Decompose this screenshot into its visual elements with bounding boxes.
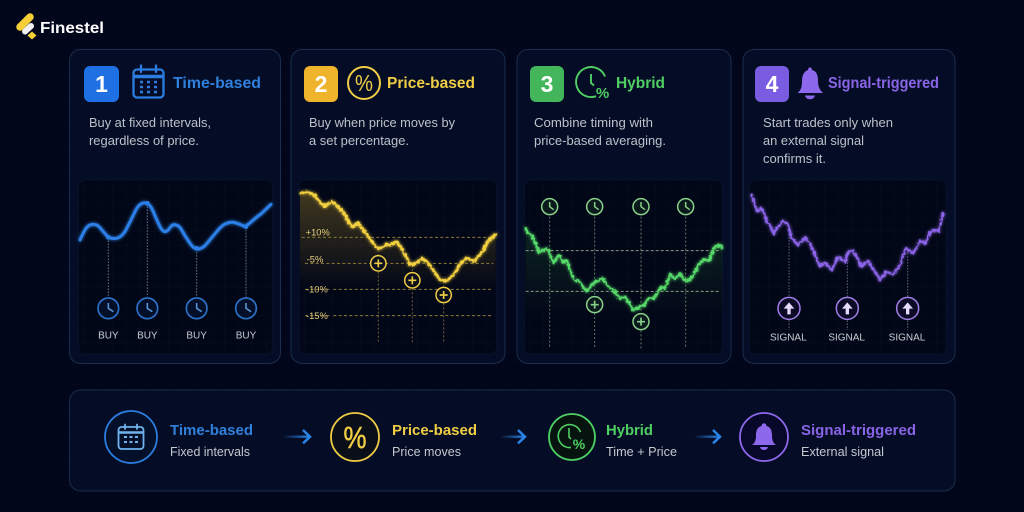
description [309,115,455,148]
heading: Signal-triggered: Signal-triggered [828,75,939,92]
clock and BUY labels: BUY [137,330,158,341]
arrow [694,430,720,443]
item: Time-based: Time-based [170,422,253,439]
chart: fixed interval buys [79,180,273,354]
item: Time-based: Fixed intervals [170,445,250,459]
clock and BUY labels [98,298,257,341]
arrow [500,430,525,443]
description [89,115,211,148]
signal markers and labels: SIGNAL [828,333,865,344]
heading: Price-based: Price-based [387,75,475,92]
description [534,115,666,148]
description: a set percentage. [309,133,409,148]
percent level labels [306,228,330,321]
clock and BUY labels: BUY [236,330,257,341]
item: Price-based [331,413,477,461]
description: Buy at fixed intervals, [89,115,211,130]
panel: time-based [70,50,280,364]
percent level labels: -15% [306,311,328,321]
item: Time-based [105,411,253,463]
percent level labels: -10% [306,284,328,294]
badge 2: 2 [315,71,327,97]
icon: bell [798,67,823,99]
description: price-based averaging. [534,133,666,148]
panel: price-based [291,50,505,364]
icon: calendar [134,66,164,98]
badge 3: 3 [541,71,553,97]
buy markers [371,256,451,303]
percent level labels: +10% [306,228,330,238]
logo: Finestel: Finestel [40,20,104,37]
panel: summary flow [70,390,955,491]
badge 1 [84,66,119,102]
icon: percent circle: % [355,70,373,96]
item: Hybrid: % [573,436,586,452]
icon: clock with percent: % [596,85,609,102]
description: regardless of price. [89,133,199,148]
clock markers [542,199,694,215]
item: Signal-triggered: External signal [801,445,884,459]
description: Combine timing with [534,115,653,130]
description [763,115,893,166]
heading: Time-based: Time-based [173,75,261,92]
item: Hybrid: Time + Price [606,445,677,459]
badge 1: 1 [95,71,108,97]
item: Price-based: % [344,420,366,455]
description: an external signal [763,133,864,148]
item: Hybrid [549,414,677,460]
description: confirms it. [763,151,826,166]
panel: hybrid [517,50,731,364]
item: Hybrid: Hybrid [606,422,653,439]
arrow [283,430,310,443]
panel: signal-triggered [743,50,955,364]
buy markers [587,297,649,330]
icon: clock with percent [576,67,609,102]
item: Price-based: Price moves [392,445,461,459]
signal markers and labels: SIGNAL [770,333,807,344]
icon: percent circle [348,67,380,99]
badge 3 [530,66,564,102]
item: Price-based: Price-based [392,422,477,439]
clock and BUY labels: BUY [186,330,207,341]
signal markers and labels [770,297,926,344]
signal markers and labels: SIGNAL [889,333,926,344]
logo: Finestel [20,17,104,40]
chart: time and price [524,180,722,354]
heading: Hybrid: Hybrid [616,75,665,92]
description: Start trades only when [763,115,893,130]
description: Buy when price moves by [309,115,455,130]
badge 2 [304,66,338,102]
chart: signals [749,180,946,354]
chart: percentage drops [299,180,497,354]
percent level labels: -5% [307,254,323,264]
clock and BUY labels: BUY [98,330,119,341]
badge 4 [755,66,789,102]
item: Signal-triggered: Signal-triggered [801,422,916,439]
item: Signal-triggered [740,413,916,461]
badge 4: 4 [766,71,779,97]
